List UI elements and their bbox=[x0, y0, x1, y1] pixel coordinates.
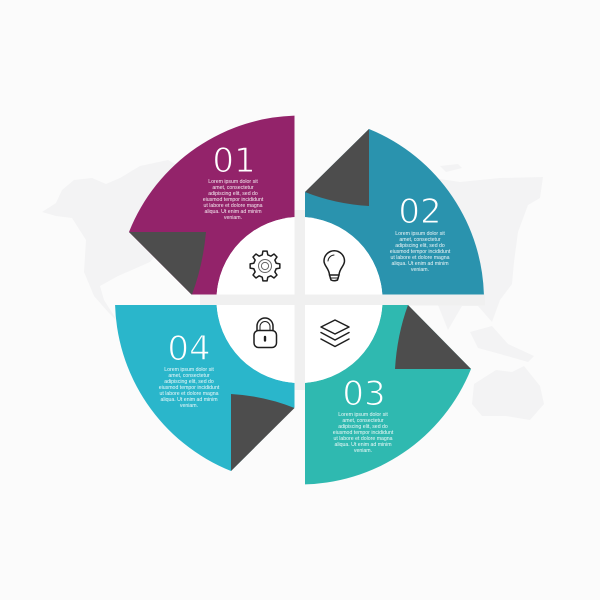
body text: Lorem ipsum dolor sit bbox=[164, 367, 214, 373]
body text: eiusmod tempor incididunt bbox=[333, 430, 394, 436]
folded corner bbox=[305, 129, 369, 206]
number: 03 bbox=[342, 374, 386, 414]
body text: adipiscing elit, sed do bbox=[395, 243, 445, 249]
body text: adipiscing elit, sed do bbox=[338, 424, 388, 430]
body text: eiusmod tempor incididunt bbox=[203, 197, 264, 203]
body text: aliqua. Ut enim ad minim bbox=[391, 261, 449, 267]
body text: amet, consectetur bbox=[399, 237, 441, 243]
world map bbox=[42, 160, 544, 470]
center circle bbox=[216, 217, 382, 383]
body text: amet, consectetur bbox=[168, 373, 210, 379]
panel: step 04 bbox=[115, 300, 300, 471]
folded corner bbox=[231, 394, 294, 471]
icon: light bulb bbox=[324, 251, 344, 281]
segment: cyan bbox=[115, 300, 300, 471]
panel: step 01 bbox=[129, 116, 300, 300]
segment: blue bbox=[300, 129, 484, 300]
segment: green bbox=[300, 300, 471, 485]
body text: veniam. bbox=[411, 267, 429, 273]
body text: veniam. bbox=[180, 403, 198, 409]
body text: amet, consectetur bbox=[342, 418, 384, 424]
body text: ut labore et dolore magna bbox=[390, 255, 450, 261]
segment: magenta bbox=[129, 116, 300, 300]
panel: step 03 bbox=[300, 300, 471, 485]
icon: padlock bbox=[254, 318, 276, 348]
body text: veniam. bbox=[224, 215, 242, 221]
icon: layers bbox=[321, 320, 349, 346]
body text: amet, consectetur bbox=[212, 185, 254, 191]
body text: adipiscing elit, sed do bbox=[164, 379, 214, 385]
body text: ut labore et dolore magna bbox=[333, 436, 393, 442]
body text: ut labore et dolore magna bbox=[159, 391, 219, 397]
body text: ut labore et dolore magna bbox=[203, 203, 263, 209]
body text: Lorem ipsum dolor sit bbox=[338, 412, 388, 418]
body text: veniam. bbox=[354, 448, 372, 454]
icon: gear bbox=[250, 251, 280, 281]
number: 02 bbox=[398, 192, 442, 232]
body text: Lorem ipsum dolor sit bbox=[208, 179, 258, 185]
body text: aliqua. Ut enim ad minim bbox=[334, 442, 392, 448]
folded corner bbox=[395, 305, 471, 369]
body text: aliqua. Ut enim ad minim bbox=[160, 397, 218, 403]
body text: aliqua. Ut enim ad minim bbox=[204, 209, 262, 215]
central gap cross bbox=[200, 210, 485, 390]
number: 01 bbox=[212, 141, 256, 181]
folded corner bbox=[129, 232, 206, 294]
body text: eiusmod tempor incididunt bbox=[159, 385, 220, 391]
number: 04 bbox=[167, 329, 211, 369]
body text: adipiscing elit, sed do bbox=[208, 191, 258, 197]
body text: Lorem ipsum dolor sit bbox=[395, 231, 445, 237]
panel: step 02 bbox=[300, 129, 484, 300]
body text: eiusmod tempor incididunt bbox=[390, 249, 451, 255]
